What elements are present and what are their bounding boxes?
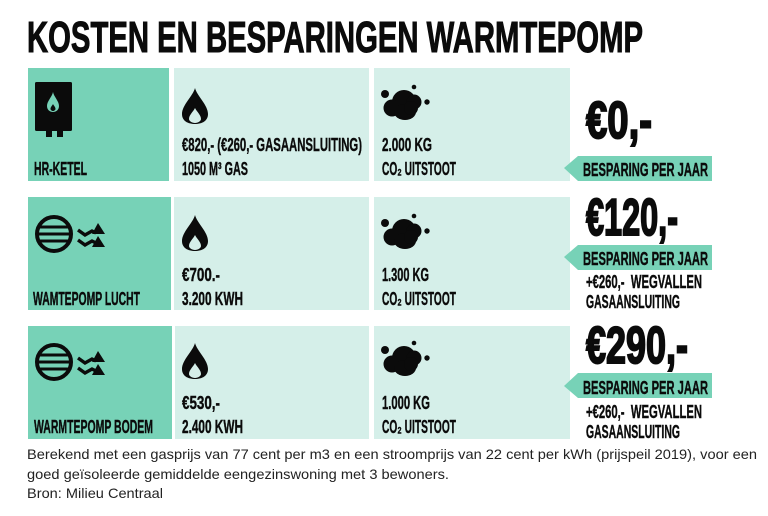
footnote [27,446,757,501]
saving amount: €0,- [586,92,652,150]
footnote: Berekend met een gasprijs van 77 cent per m3 en een stroomprijs van 22 cent per kWh (prijspeil 2019), voor een [27,446,757,462]
icon: ground heat pump [37,345,105,379]
saving amount: €120,- [586,189,678,247]
row: warmtepomp lucht [28,189,712,312]
text: usage: 3.200 KWH [182,288,243,309]
text: emissions: 2.000 KG [382,134,432,155]
icon: gas flame [182,343,208,379]
note: gas connection: GASAANSLUITING [586,291,680,312]
panel: warmtepomp bodem type [28,326,172,439]
icon: CO2 cloud [381,341,430,376]
arrow: saving per year [564,373,712,398]
text: emissions: 1.300 KG [382,264,429,285]
footnote: Bron: Milieu Centraal [27,485,163,501]
arrow: saving per year [564,156,712,181]
saving amount: €290,- [586,317,688,375]
label: HR-ketel: HR-KETEL [34,158,87,179]
text: cost: €820,- (€260,- GASAANSLUITING) [182,134,362,155]
text: usage: 2.400 KWH [182,416,243,437]
icon: air heat pump [37,217,105,251]
panel: warmtepomp lucht type [28,197,171,310]
row: warmtepomp bodem [28,317,712,442]
icon: CO2 cloud [381,85,430,120]
text: CO2 label: CO₂ UITSTOOT [382,158,456,179]
panel: bodem emissions [374,326,570,439]
panel: HR-ketel emissions [374,68,570,181]
panel: HR-ketel cost [174,68,369,181]
icon: CO2 cloud [381,214,430,249]
arrow: saving per year [564,245,712,270]
text: cost: €700.- [182,264,220,285]
panel: lucht cost [174,197,369,310]
text: CO2 label: CO₂ UITSTOOT [382,416,456,437]
text: CO2 label: CO₂ UITSTOOT [382,288,456,309]
text: cost: €530,- [182,392,220,413]
footnote: goed geïsoleerde gemiddelde eengezinswoning met 3 bewoners. [27,466,449,482]
label: warmtepomp bodem: WARMTEPOMP BODEM [34,416,153,437]
note: gas connection: GASAANSLUITING [586,421,680,442]
text: usage: 1050 M³ GAS [182,158,248,179]
label: warmtepomp lucht: WAMTEPOMP LUCHT [33,288,140,309]
text: emissions: 1.000 KG [382,392,430,413]
icon: gas flame [182,88,208,124]
row: HR-ketel [28,68,712,181]
panel: lucht emissions [374,197,570,310]
panel: HR-ketel type [28,68,169,181]
icon: boiler [35,82,72,137]
icon: gas flame [182,215,208,251]
panel: bodem cost [175,326,369,439]
